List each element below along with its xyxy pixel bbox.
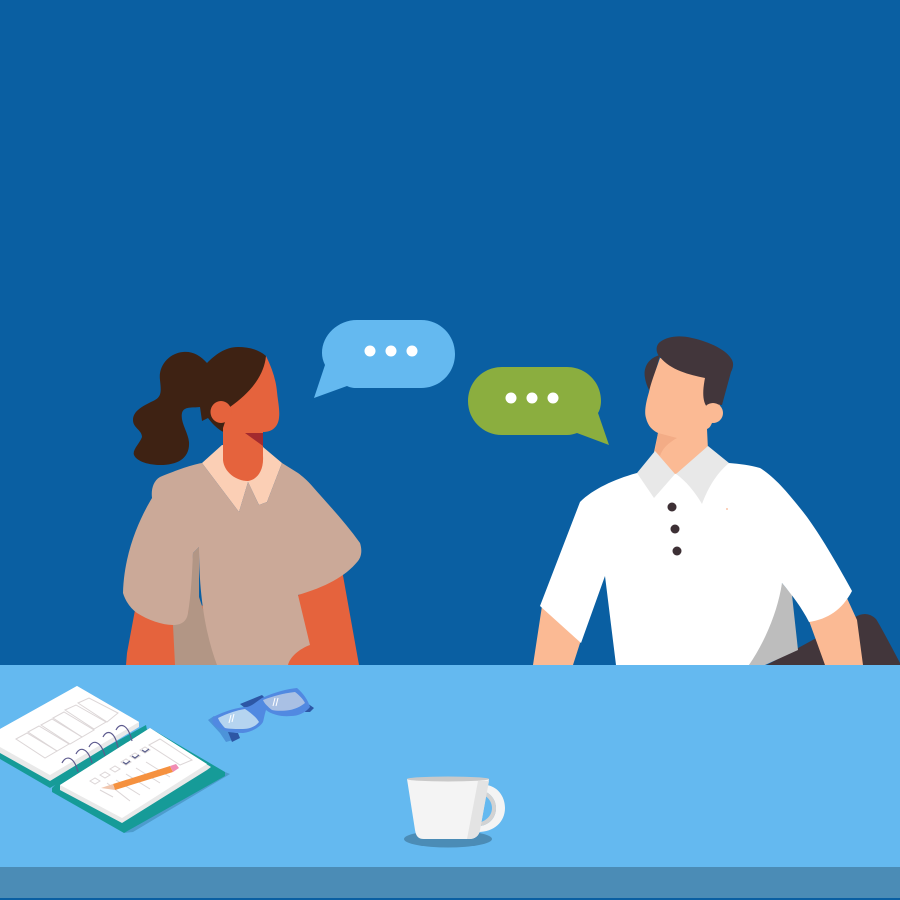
woman face and neck	[223, 356, 279, 481]
cup rim	[407, 776, 489, 782]
right lens	[263, 692, 305, 711]
man shirt	[540, 463, 852, 665]
cup body	[407, 779, 489, 839]
checkmarks	[123, 749, 149, 764]
man shirt shadow	[749, 583, 798, 665]
man arms	[533, 596, 863, 665]
woman ear	[210, 401, 232, 423]
right cover	[52, 728, 225, 833]
cup shadow	[404, 830, 492, 848]
man back hair	[645, 355, 660, 392]
left cover	[0, 725, 147, 788]
woman blouse shadow	[173, 547, 220, 665]
bubble dots	[506, 392, 558, 404]
bubble dots	[364, 346, 418, 356]
spiral rings	[62, 725, 132, 772]
woman collar	[202, 445, 282, 512]
glasses shadow	[208, 716, 240, 742]
glasses temples and bridge	[228, 695, 314, 742]
left page boxes	[16, 698, 118, 758]
woman neck shadow	[245, 433, 263, 446]
glasses	[208, 688, 314, 742]
woman blouse	[123, 463, 361, 665]
man buttons	[668, 502, 682, 556]
man figure	[533, 336, 863, 665]
left lens	[218, 709, 259, 729]
glasses frame	[212, 688, 310, 733]
handle inner rim	[480, 792, 496, 826]
notebook	[0, 686, 230, 833]
cup handle	[478, 785, 505, 832]
coffee cup	[404, 776, 505, 848]
man ear	[703, 403, 723, 423]
table top	[0, 665, 900, 867]
woman figure	[123, 347, 361, 665]
pencil	[101, 764, 179, 790]
woman arms	[126, 570, 359, 665]
man neck and face	[645, 358, 722, 476]
chair	[765, 614, 900, 666]
left page	[0, 686, 139, 781]
lens glints	[229, 698, 278, 723]
checklist	[90, 739, 192, 801]
woman hair	[133, 347, 266, 465]
tiny fleck on shirt	[726, 508, 728, 510]
man hair	[657, 336, 733, 407]
man collar	[637, 446, 729, 504]
cup side shade	[467, 781, 489, 839]
speech bubble: blue	[314, 320, 455, 398]
table edge	[0, 867, 900, 898]
man neck shadow	[655, 433, 677, 456]
speech bubble: green	[468, 367, 609, 445]
right page	[60, 728, 211, 823]
notebook shadow	[124, 772, 230, 833]
